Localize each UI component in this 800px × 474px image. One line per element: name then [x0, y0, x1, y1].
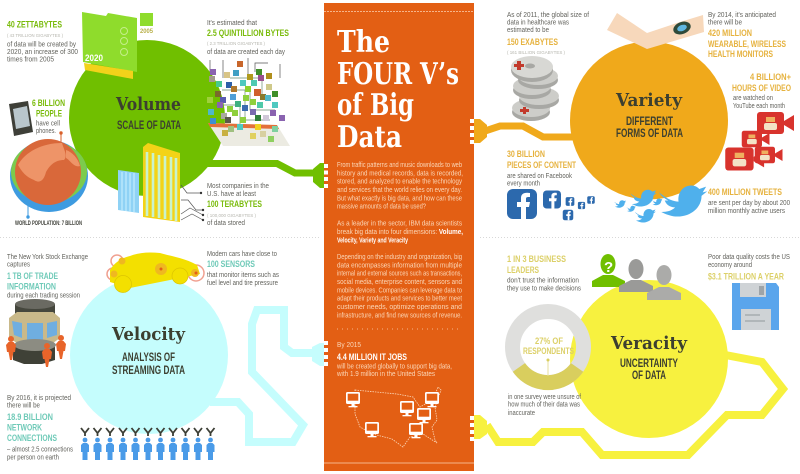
icon: car with sensors — [107, 252, 204, 292]
illustration: stock exchange floor — [6, 299, 66, 367]
text: industry paragraph: customer needs, optimize operations and — [337, 304, 462, 311]
stat: 2.5 quintillion bytes: 2.5 QUINTILLION BYTES — [207, 28, 289, 39]
stat: 2.5 quintillion bytes: ( 2.3 TRILLION GIGABYTES ) — [207, 41, 265, 47]
heading: velocity: Velocity — [111, 324, 185, 345]
stat: 1 in 3 business leaders: they use to make decisions — [507, 286, 581, 292]
circle: volume — [69, 40, 225, 196]
icon: mobile phone — [9, 101, 33, 136]
circle: velocity — [70, 276, 228, 434]
text: IBM paragraph: Velocity, Variety and Veracity — [337, 238, 408, 244]
stat: 18.9 billion network connections: By 2016, it is projected — [7, 395, 71, 402]
stat: 400 million tweets: million monthly active users — [708, 208, 785, 215]
title: of Big — [337, 88, 414, 123]
icon: three business leaders: ? — [604, 259, 613, 276]
stat: 150 exabytes: As of 2011, the global size of — [507, 12, 589, 19]
stat: 30 billion pieces of content: 30 BILLION — [507, 149, 545, 160]
connector cap: volume — [313, 163, 325, 188]
stat: 1 tb of trade information: The New York Stock Exchange — [7, 254, 88, 261]
text: intro paragraph: But what exactly is big data, and how can these — [337, 195, 462, 202]
stat: 30 billion pieces of content: are shared on Facebook — [507, 173, 572, 180]
stat: 6 billion people: have cell — [36, 120, 60, 128]
icon: 2005 data card: 2005 — [140, 29, 154, 35]
subheading: scale of data: SCALE OF DATA — [117, 120, 181, 132]
stat: 400 million tweets — [708, 187, 790, 215]
connector: volume — [205, 164, 316, 173]
connector tabs: left and right — [324, 119, 474, 441]
text: intro paragraph — [337, 162, 463, 211]
panel: veracity — [473, 254, 790, 455]
stat: 1 tb of trade information — [7, 254, 88, 300]
connector cap: veracity — [473, 415, 487, 439]
icon: three business leaders — [592, 254, 681, 300]
text: industry paragraph: social media, enterprise content, sensors and — [337, 279, 462, 286]
stat: 18.9 billion network connections: per person on earth — [7, 454, 59, 462]
stat: 4.4 million IT jobs: will be created globally to support big data, — [336, 364, 452, 370]
connector cap: variety — [473, 119, 487, 143]
subheading: analysis of streaming data: ANALYSIS OF — [122, 352, 175, 364]
panel: variety — [473, 12, 794, 222]
stat: 1 tb of trade information: during each trading session — [7, 292, 80, 300]
stat: 1 tb of trade information: 1 TB OF TRADE — [7, 271, 58, 282]
stat: 4.4 million IT jobs — [336, 342, 452, 378]
pictogram: connections per person — [81, 428, 214, 460]
stat: 3.1 trillion a year — [708, 254, 790, 282]
title — [337, 25, 459, 155]
stat: 100 sensors — [207, 251, 279, 287]
stat: 6 billion people: 6 BILLION — [32, 98, 65, 109]
stat: 30 billion pieces of content: every month — [507, 180, 540, 188]
illustration: arm with health monitor — [607, 13, 704, 49]
stat: 150 exabytes: data in healthcare was — [507, 20, 569, 26]
stat: 100 sensors: fuel level and tire pressure — [207, 280, 278, 287]
stat: 18.9 billion network connections: 18.9 BILLION — [7, 412, 53, 423]
stat: 150 exabytes: 150 EXABYTES — [507, 37, 558, 48]
heading: veracity: Veracity — [610, 333, 688, 354]
icon: stack of disks — [511, 56, 559, 121]
panel: velocity — [6, 251, 325, 462]
stat: 4.4 million IT jobs: with 1.9 million in the United States — [336, 371, 435, 378]
panel: volume — [7, 12, 325, 227]
stat: 1 in 3 business leaders: 1 IN 3 BUSINESS — [507, 254, 566, 265]
icon: 2005 data card — [140, 13, 154, 35]
stat: 400 million tweets: are sent per day by about 200 — [708, 200, 790, 207]
text: survey note: in one survey were unsure of — [508, 394, 581, 401]
icon: globe — [10, 131, 88, 219]
title: FOUR V’s — [337, 57, 459, 92]
label: world population: WORLD POPULATION: 7 BILLION — [15, 221, 82, 227]
heading: variety: Variety — [615, 90, 682, 111]
text: industry paragraph: internal and external sources such as transactions, — [337, 271, 462, 278]
stat: 1 tb of trade information: INFORMATION — [7, 282, 56, 292]
stat: 150 exabytes — [507, 12, 589, 56]
heading: volume: Volume — [115, 94, 181, 115]
text: industry paragraph — [337, 254, 462, 319]
stat: 420 million monitors: 420 MILLION — [708, 28, 752, 39]
panel background — [324, 3, 474, 471]
stat: 2.5 quintillion bytes: It's estimated that — [207, 20, 257, 27]
stat: 40 zettabytes: 40 ZETTABYTES — [7, 20, 62, 30]
stat: 40 zettabytes: 2020, an increase of 300 — [7, 49, 78, 56]
connector: variety — [482, 126, 575, 137]
icons: facebook logos — [507, 189, 595, 220]
connector cap: velocity — [312, 343, 325, 366]
connector: veracity — [487, 354, 783, 455]
text: IBM paragraph: As a leader in the sector, IBM data scientists — [337, 220, 462, 228]
text: intro paragraph: stored, and analyzed to enable the technology — [337, 179, 462, 186]
stat: 30 billion pieces of content: PIECES OF CONTENT — [507, 160, 576, 171]
stat: 18.9 billion network connections: NETWORK — [7, 422, 42, 434]
stat: 100 terabytes: of data stored — [207, 220, 245, 227]
stat: 150 exabytes: ( 161 BILLION GIGABYTES ) — [507, 50, 565, 56]
stat: 100 sensors: 100 SENSORS — [207, 259, 255, 270]
stat: 6 billion people — [32, 98, 65, 135]
subheading: different forms of data: DIFFERENT — [626, 116, 673, 128]
map: united states with computers — [346, 387, 441, 447]
subheading: uncertainty of data: OF DATA — [632, 370, 666, 382]
stat: 4 billion hours of video: YouTube each month — [733, 103, 785, 110]
stat: 1 in 3 business leaders: don't trust the information — [507, 278, 579, 284]
text: survey note: inaccurate — [508, 410, 535, 417]
illustration: office buildings — [118, 143, 204, 222]
icon: 2020 data card: 2020 — [85, 53, 103, 63]
stat: 100 sensors: that monitor items such as — [207, 272, 279, 279]
subheading: different forms of data: FORMS OF DATA — [616, 128, 683, 140]
subheading: analysis of streaming data — [112, 352, 185, 377]
title: The — [337, 25, 390, 60]
stat: 100 terabytes: 100 TERABYTES — [207, 199, 262, 210]
stat: 3.1 trillion a year: Poor data quality costs the US — [708, 254, 790, 261]
stat: 40 zettabytes: ( 43 TRILLION GIGABYTES ) — [7, 33, 63, 39]
stat: 2.5 quintillion bytes: of data are created each day — [207, 49, 285, 56]
circle: veracity — [570, 280, 728, 438]
stat: 4 billion hours of video: are watched on — [733, 95, 773, 102]
stat: 1 tb of trade information: captures — [7, 262, 30, 268]
stat: 40 zettabytes: times from 2005 — [7, 56, 54, 64]
stat: 4.4 million IT jobs: By 2015 — [337, 342, 361, 349]
stat: 420 million monitors: HEALTH MONITORS — [708, 49, 773, 60]
text: survey note — [508, 394, 581, 417]
stat: 18.9 billion network connections: – almost 2.5 connections — [7, 446, 73, 454]
section divider lines — [0, 236, 320, 238]
stat: 4.4 million IT jobs: 4.4 MILLION IT JOBS — [337, 352, 407, 363]
icons: twitter birds — [614, 186, 707, 222]
stat: 6 billion people: phones. — [36, 128, 56, 135]
icon: floppy disk — [732, 283, 779, 330]
stat: 6 billion people: PEOPLE — [36, 108, 62, 120]
stat: 30 billion pieces of content — [507, 149, 576, 188]
stat: 420 million monitors: there will be — [708, 20, 742, 26]
stat: 40 zettabytes: of data will be created by — [7, 42, 76, 48]
text: IBM paragraph — [337, 220, 463, 244]
stat: 2.5 quintillion bytes — [207, 20, 289, 56]
stat: 150 exabytes: estimated to be — [507, 27, 549, 34]
chart: 27 percent donut: RESPONDENTS — [523, 346, 574, 357]
stat: 100 terabytes: Most companies in the — [207, 183, 269, 190]
stat: 40 zettabytes — [7, 20, 78, 64]
stat: 1 in 3 business leaders — [507, 254, 581, 292]
subheading: uncertainty of data: UNCERTAINTY — [620, 358, 678, 370]
connector: velocity — [210, 310, 316, 442]
chart: 27 percent donut: 27% OF — [535, 336, 563, 347]
stat: 18.9 billion network connections: CONNECTIONS — [7, 433, 57, 444]
text: industry paragraph: mobile devices. Companies can leverage data to — [337, 287, 462, 294]
stat: 1 in 3 business leaders: LEADERS — [507, 265, 539, 276]
text: intro paragraph: history and medical records, data is recorded, — [337, 170, 463, 177]
stat: 420 million monitors: By 2014, it's anticipated — [708, 12, 776, 19]
stat: 18.9 billion network connections — [7, 395, 73, 462]
illustration: circuit board of data cubes — [207, 58, 290, 146]
chart: 27 percent donut — [512, 312, 584, 383]
text: industry paragraph: Depending on the industry and organization, big — [337, 254, 462, 261]
subheading: different forms of data — [616, 116, 683, 140]
title: Data — [337, 120, 402, 155]
panel: introduction — [324, 3, 474, 471]
stat: 4 billion hours of video — [732, 72, 791, 110]
subheading: uncertainty of data — [620, 358, 678, 382]
subheading: analysis of streaming data: STREAMING DATA — [112, 365, 185, 377]
stat: 100 terabytes — [207, 183, 269, 227]
stat: 100 terabytes: ( 100,000 GIGABYTES ) — [207, 213, 256, 219]
text: industry paragraph: adapt their products and services to better meet — [337, 296, 462, 303]
text: intro paragraph: and services that the world relies on every day. — [337, 187, 462, 194]
text: industry paragraph: infrastructure, and find new sources of revenue. — [337, 312, 462, 319]
stat: 18.9 billion network connections: there will be — [7, 402, 40, 410]
stat: 420 million monitors — [708, 12, 786, 60]
stat: 100 sensors: Modern cars have close to — [207, 251, 277, 258]
stat: 100 terabytes: U.S. have at least — [207, 191, 256, 198]
text: survey note: how much of their data was — [508, 402, 580, 408]
text: industry paragraph: data encompasses information from multiple — [337, 262, 462, 269]
icons: youtube cameras — [725, 112, 794, 171]
text: intro paragraph: massive amounts of data be used? — [337, 204, 426, 211]
circle: variety — [570, 42, 728, 200]
text: intro paragraph: From traffic patterns and music downloads to web — [337, 162, 462, 169]
stat: 3.1 trillion a year: economy around — [708, 262, 752, 269]
text: IBM paragraph: break big data into four dimensions: Volume, — [337, 229, 463, 236]
icon: 2020 data card — [82, 12, 137, 79]
